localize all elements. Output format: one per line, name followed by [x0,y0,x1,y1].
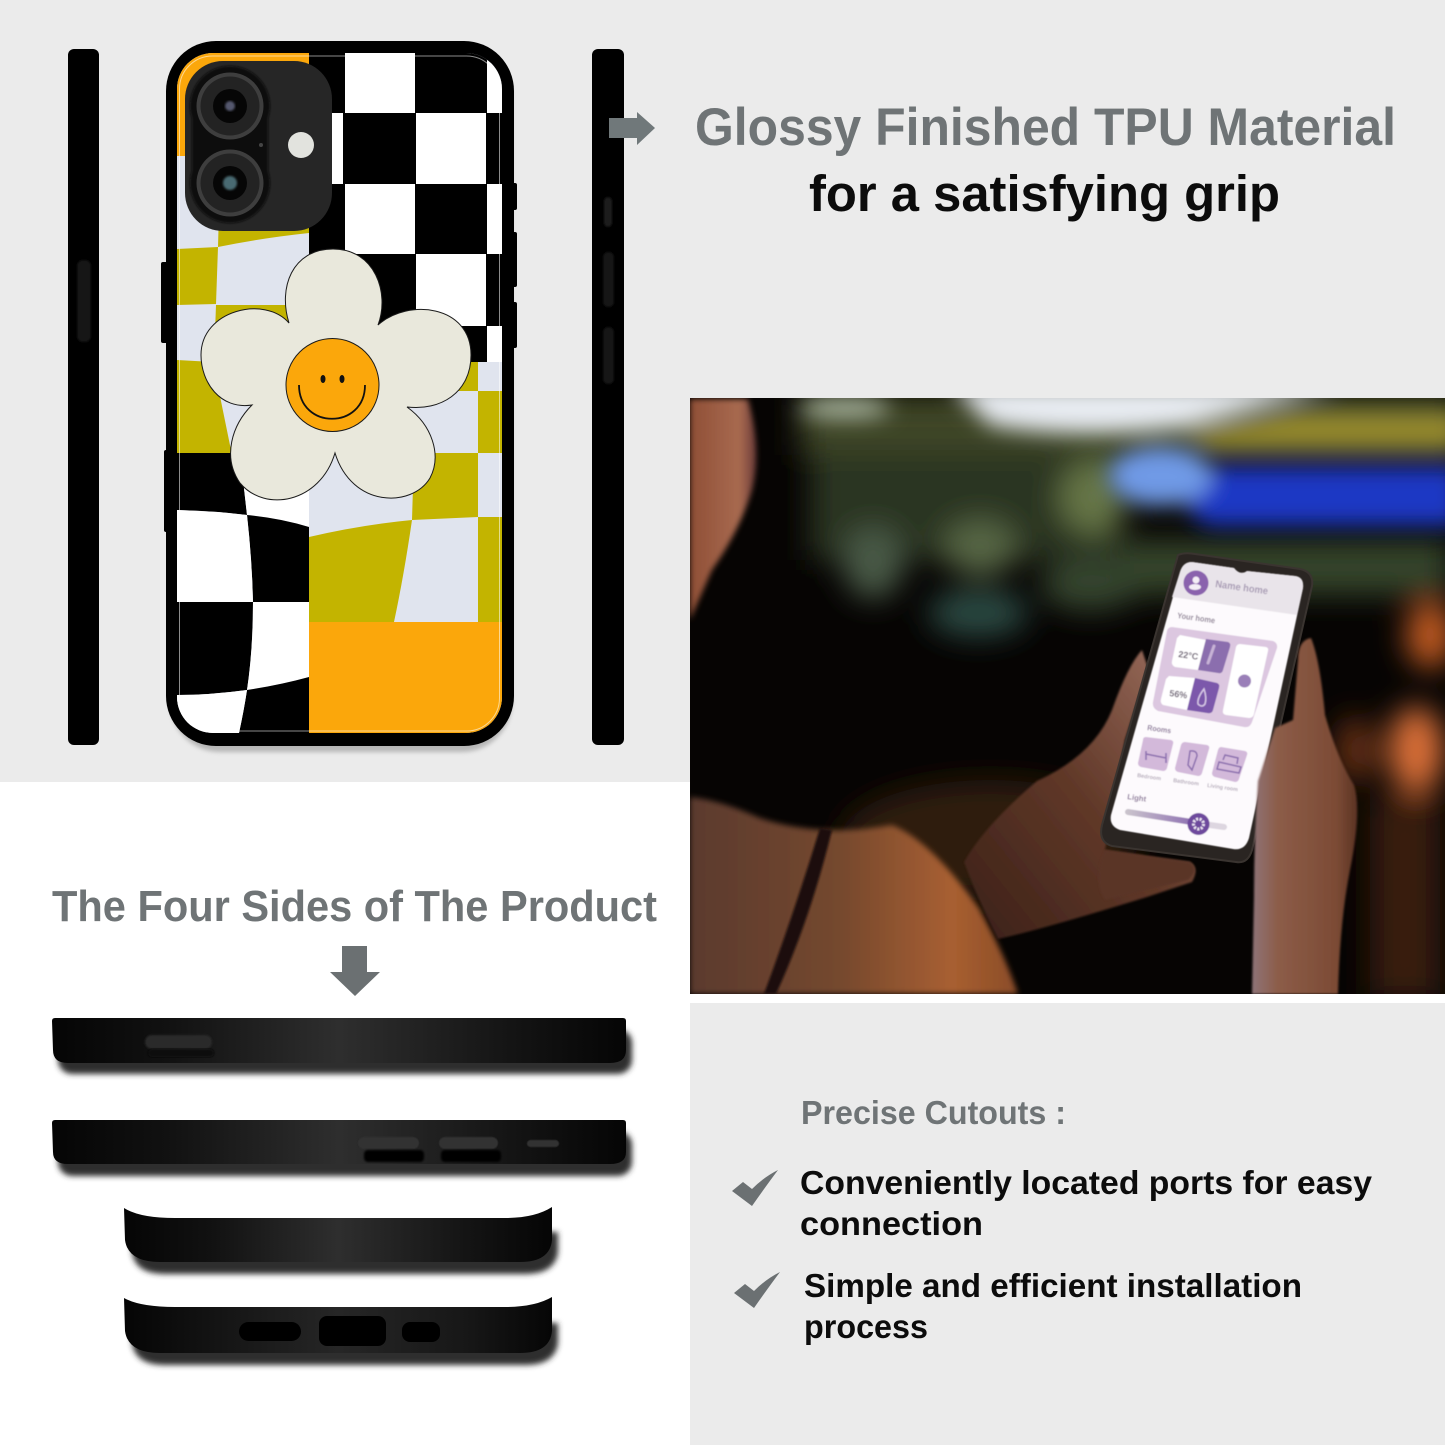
phone screen: Name home [1215,579,1269,597]
phone screen: 22°C [1178,649,1199,662]
phone screen: Rooms [1147,723,1172,735]
side buttons of the case [161,183,517,532]
feature text: installation [804,1267,1302,1345]
phone screen: 56% [1169,688,1188,700]
camera lens: upper [196,72,264,140]
arrow pointing down to side views [330,946,380,996]
check mark one [732,1170,778,1206]
port cutouts [239,1316,440,1346]
feature text: ports [800,1164,1373,1242]
blurred background scenery [800,395,1445,1000]
left thumb over phone edge [1106,850,1195,886]
phone screen: Your home [1177,611,1216,625]
phone case back view [161,41,517,752]
camera flash [288,132,314,158]
top edge of the case [52,1018,632,1074]
feature text: ports: Conveniently located ports for easy [800,1164,1373,1201]
heading: glossy finished material [695,98,1396,222]
panel: lower right grey background [690,1003,1445,1445]
heading: precise cutouts: Precise Cutouts : [801,1094,1066,1131]
panel: top grey background [0,0,1445,782]
phone screen: Living room [1207,783,1238,793]
phone in the photo [1101,553,1312,862]
feature text: installation: Simple and efficient installation [804,1267,1302,1304]
right hand [1252,638,1357,994]
phone screen [1111,562,1303,849]
dress strap [764,828,832,994]
white strip under the photo [690,994,1445,1003]
feature text: ports: connection [800,1205,983,1242]
sky and lit band behind the scenery [799,385,1445,526]
room tiles [1138,737,1247,782]
face [690,399,756,620]
bottom edge of the case with port cutouts [124,1297,558,1365]
phone screen: Bedroom [1137,773,1161,782]
photo: hands holding a phone at night [690,385,1445,1000]
side edge of the case with buttons [52,1120,632,1176]
left hand [964,650,1196,939]
heading: glossy finished material: Glossy Finished TPU Material [695,98,1396,157]
camera-end edge of the case [124,1207,558,1274]
checkerboard artwork [177,53,502,733]
camera lens: lower [196,150,264,216]
camera module [185,61,332,231]
feature text: installation: process [804,1308,928,1345]
check mark two [734,1272,780,1308]
heading: glossy finished material: for a satisfying grip [809,165,1280,222]
arrow pointing to the material callout [609,112,655,145]
shoulder [690,797,1018,994]
left side view of the case [68,49,99,745]
heading: four sides: The Four Sides of The Product [52,882,657,931]
phone screen: Bathroom [1173,778,1199,788]
phone screen: Light [1127,792,1147,804]
light slider [1128,812,1224,835]
flower with smiley [201,249,471,500]
right side view of the case [592,49,624,745]
